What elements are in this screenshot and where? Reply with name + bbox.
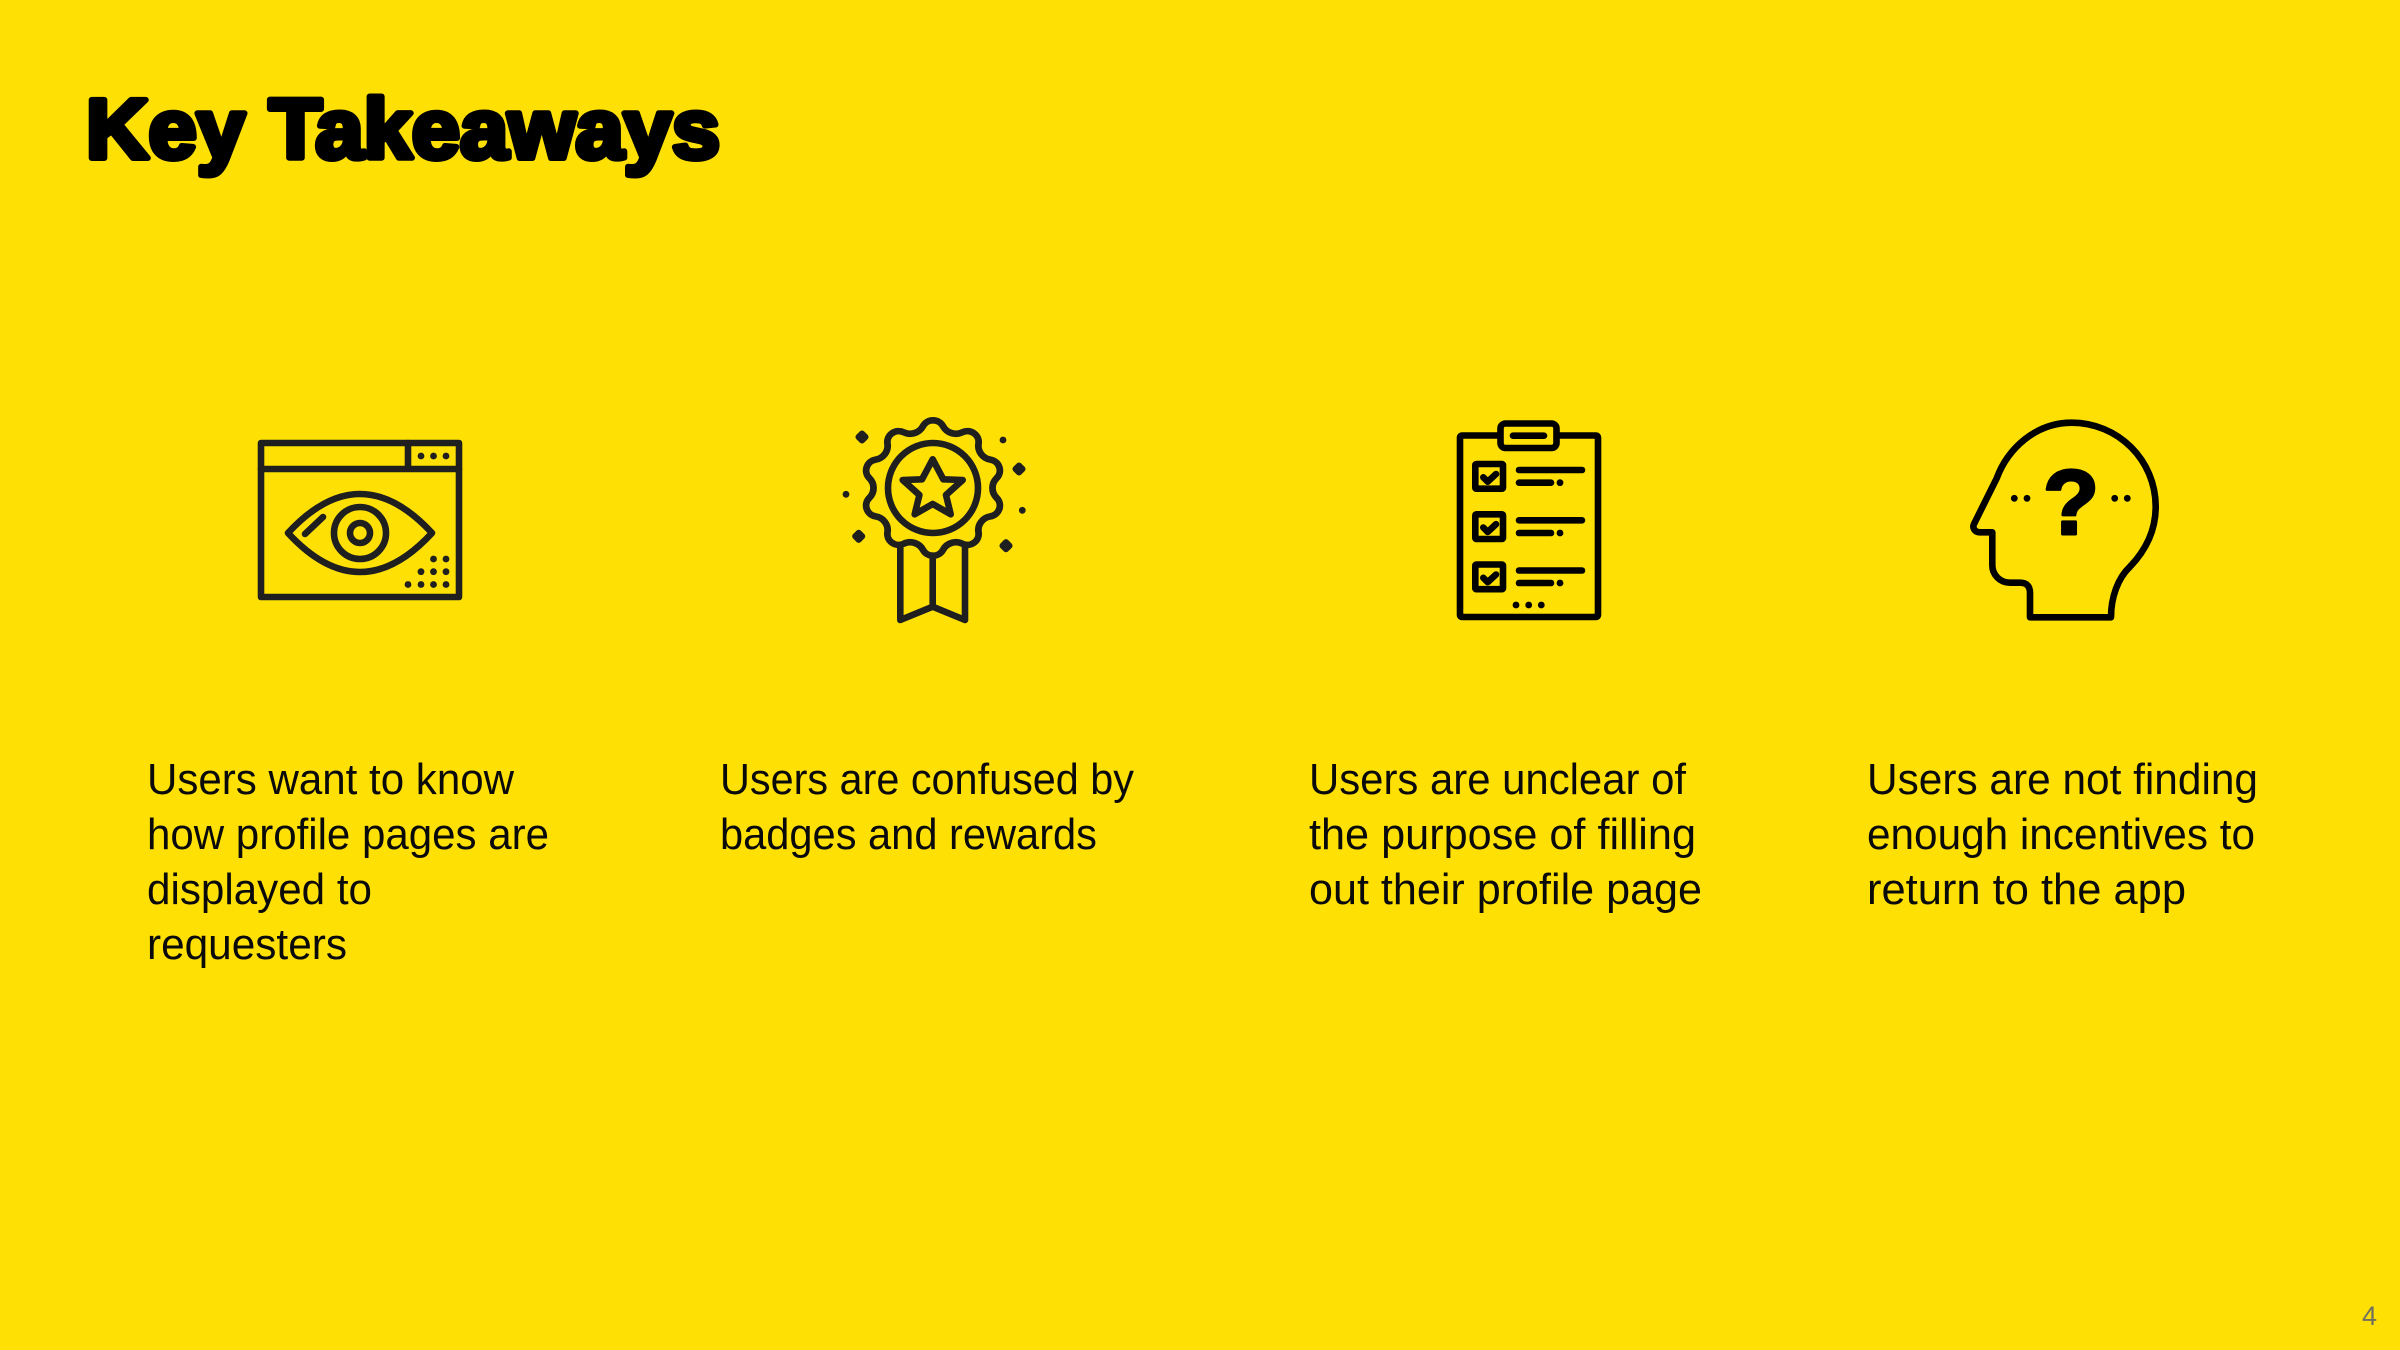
panel: return incentives	[1867, 423, 2258, 914]
panel: profile visibility	[147, 443, 549, 969]
text: takeaway 3: out their profile page	[1309, 865, 1702, 914]
text: takeaway 4: return to the app	[1867, 865, 2186, 914]
text: takeaway 1: how profile pages are	[147, 810, 549, 859]
text: takeaway 4: Users are not finding	[1867, 755, 2258, 804]
icon: head with question mark	[1973, 423, 2156, 617]
page number: 4	[2362, 1301, 2377, 1331]
icon: award ribbon with star	[843, 420, 1027, 620]
icon: browser window with eye	[261, 443, 459, 597]
text: takeaway 1	[147, 755, 549, 969]
text: takeaway 2: badges and rewards	[720, 810, 1097, 859]
icon: clipboard checklist	[1460, 424, 1598, 617]
text: takeaway 4	[1867, 755, 2258, 914]
icon: head with question mark: ?	[2043, 452, 2099, 554]
title: Key Takeaways	[86, 82, 720, 176]
panel: profile purpose	[1309, 424, 1702, 914]
text: takeaway 4: enough incentives to	[1867, 810, 2255, 859]
text: takeaway 3: the purpose of filling	[1309, 810, 1696, 859]
text: takeaway 1: Users want to know	[147, 755, 514, 804]
text: takeaway 2: Users are confused by	[720, 755, 1134, 804]
text: takeaway 3	[1309, 755, 1702, 914]
text: takeaway 3: Users are unclear of	[1309, 755, 1687, 804]
panel: badges and rewards	[720, 420, 1134, 859]
text: takeaway 1: requesters	[147, 920, 347, 969]
text: takeaway 1: displayed to	[147, 865, 372, 914]
text: takeaway 2	[720, 755, 1134, 859]
